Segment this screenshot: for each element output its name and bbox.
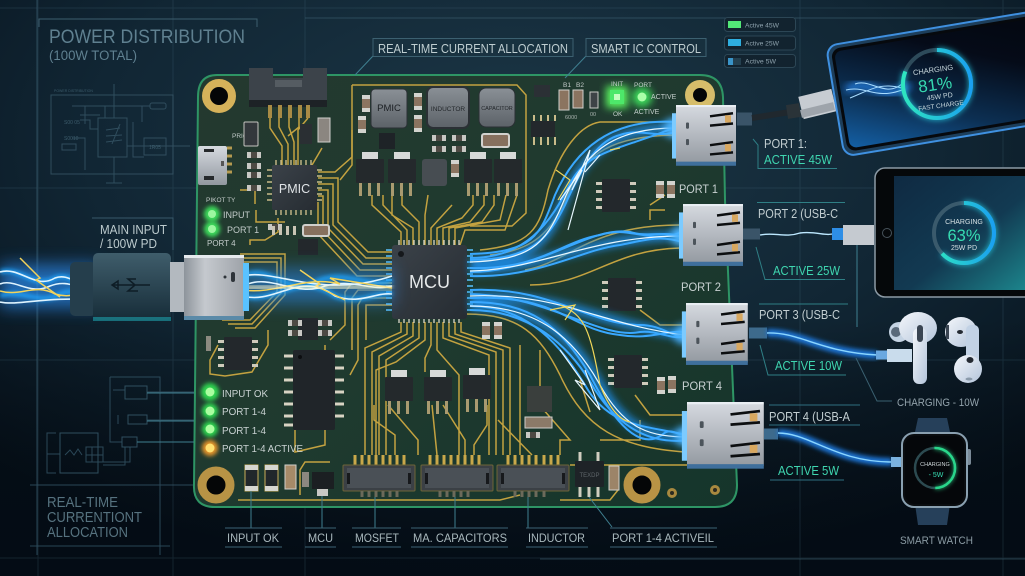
cable: port 2 to tablet (743, 233, 874, 235)
title: POWER DISTRIBUTION (49, 26, 245, 48)
status LEDs: left top: INPUT (223, 210, 251, 220)
MCU chip: MCU (409, 272, 450, 292)
label: port 4: PORT 4 (USB-A (769, 410, 851, 424)
main input plug (70, 253, 249, 321)
label: port 1 (753, 137, 837, 168)
small parts: top middle: 6000 (565, 115, 577, 121)
energy flow: output lightning to ports (470, 118, 695, 446)
watch charge ring (915, 448, 955, 488)
PMIC chip (267, 160, 322, 215)
legend (724, 18, 796, 68)
label: inductor: INDUCTOR (528, 531, 585, 545)
bottom-left parts (245, 465, 334, 496)
bottom connectors (343, 452, 619, 497)
port silk labels (679, 182, 722, 393)
legend row: active 25W: Active 25W (745, 40, 780, 48)
device: earbuds (889, 312, 982, 384)
status LEDs: left bottom (201, 383, 303, 456)
panel: circuit board (194, 68, 737, 507)
status LEDs: left top (204, 133, 259, 248)
callout: smart IC control: SMART IC CONTROL (591, 42, 701, 56)
tablet charge ring (934, 203, 994, 263)
top power components: PMIC (377, 103, 401, 114)
label: smart watch: SMART WATCH (900, 535, 973, 547)
legend row: active 5W: Active 5W (745, 58, 777, 66)
status LEDs: left bottom: INPUT OK (222, 389, 268, 400)
PMIC chip: PMIC (279, 182, 310, 196)
DIP IC (284, 350, 344, 430)
phone energy bolt (846, 83, 910, 98)
status LEDs: left top: PORT 4 (207, 239, 236, 248)
label: port 2: ACTIVE 25W (773, 264, 840, 278)
title: (100W TOTAL) (49, 48, 137, 63)
schematic: top left: S00 05 (64, 120, 80, 126)
label: mcu: MCU (308, 531, 333, 545)
schematic: top left (51, 84, 190, 183)
callout: main input: MAIN INPUT (100, 223, 167, 237)
USB port 4 (682, 402, 764, 469)
MCU chip (386, 240, 473, 323)
left small parts (206, 118, 332, 370)
status LEDs: top: INIT (611, 81, 623, 88)
energy flow: input lightning (0, 258, 393, 308)
schematic: bottom left (30, 0, 200, 555)
status LEDs: top: ACTIVE (651, 94, 677, 101)
label: port 1: PORT 1: (764, 137, 807, 151)
status LEDs: left top: PORT 1 (227, 225, 259, 235)
small parts: top middle: B1 (563, 82, 571, 89)
bottom connectors: TEXDP (579, 473, 600, 479)
top MOSFETs (356, 152, 522, 196)
port silk labels: PORT 1 (679, 182, 718, 196)
status LEDs: top (606, 81, 677, 118)
phone charge ring: CHARGING (912, 63, 954, 77)
phone charge ring: FAST CHARGE (918, 99, 965, 113)
port silk labels: PORT 2 (681, 280, 721, 294)
label: port 2: PORT 2 (USB-C (758, 207, 838, 221)
callout: real-time current allocation: REAL-TIME CURRENT ALLOCATION (378, 42, 568, 56)
small parts: top middle: B2 (576, 82, 584, 89)
label: port 2 (756, 202, 845, 280)
status LEDs: top: OK (613, 111, 623, 118)
caption: real-time current allocation (47, 495, 142, 541)
label: capacitors: MA. CAPACITORS (413, 531, 507, 545)
label: port 1: ACTIVE 45W (764, 153, 832, 167)
board substrate (194, 75, 737, 507)
phone charge ring (903, 50, 971, 118)
USB port 1 (672, 105, 736, 166)
header connector (249, 68, 327, 118)
label: port 3 (759, 304, 848, 375)
bottom labels (225, 528, 717, 547)
caption: real-time current allocation: CURRENTIONT (47, 510, 142, 526)
watch charge ring: CHARGING (920, 462, 950, 468)
title (39, 19, 257, 63)
schematic: top left: 1R05 (149, 145, 161, 151)
top power components: CAPACITOR (481, 106, 513, 112)
right small parts (525, 179, 720, 498)
status LEDs: left bottom: PORT 1-4 (222, 426, 266, 437)
port silk labels: PORT 4 (682, 379, 722, 393)
callout: main input (92, 218, 173, 251)
device: tablet (875, 168, 1025, 297)
leader lines (137, 56, 857, 528)
label: port 1-4 active: PORT 1-4 ACTIVEIL (612, 531, 714, 545)
callout: main input: / 100W PD (100, 237, 157, 251)
gold traces (210, 85, 700, 500)
label: port 4 (769, 405, 860, 480)
device: smart watch (902, 418, 971, 525)
small parts: top middle (531, 82, 598, 145)
mounting holes (202, 83, 711, 499)
status LEDs: left top: PRI6 (232, 133, 247, 140)
small parts: top middle: 00 (590, 112, 596, 118)
label: port 3: ACTIVE 10W (775, 359, 842, 373)
status LEDs: top: ACTIVE (634, 109, 660, 116)
USB port 3 (682, 303, 748, 365)
status LEDs: left top: PIKOT TY (206, 197, 236, 204)
cable: port 3 to earbuds (749, 333, 912, 356)
device: phone (826, 3, 1025, 156)
bottom MOSFETs (385, 322, 502, 414)
cable: port 1 to phone (737, 100, 834, 119)
top power components: INDUCTOR (431, 106, 465, 113)
phone charge ring: 45W PD (926, 92, 953, 103)
USB port 2 (679, 204, 743, 266)
tablet charge ring: 25W PD (951, 245, 977, 252)
caption: real-time current allocation: REAL-TIME (47, 495, 118, 511)
status LEDs: top: PORT (634, 82, 652, 89)
phone charge ring: 81% (917, 73, 953, 97)
label: earbuds charging (856, 358, 980, 409)
micro USB connector (198, 146, 232, 185)
label: port 3: PORT 3 (USB-C (759, 308, 840, 322)
schematic: top left: S0010 (64, 136, 79, 142)
label: earbuds charging: CHARGING - 10W (897, 397, 980, 409)
status LEDs: left bottom: PORT 1-4 (222, 407, 266, 418)
label: mosfet: MOSFET (355, 531, 400, 545)
label: input ok: INPUT OK (227, 531, 279, 545)
cable: port 4 to watch (764, 433, 903, 462)
legend row: active 45W: Active 45W (745, 22, 780, 30)
caption: real-time current allocation: ALLOCATION (47, 525, 128, 541)
status LEDs: left bottom: PORT 1-4 ACTIVE (222, 444, 303, 455)
watch charge ring: - 5W (929, 472, 944, 479)
top power components (358, 87, 515, 152)
tablet charge ring: 63% (947, 227, 981, 245)
schematic: top left: POWER DISTRIBUTION (54, 89, 93, 93)
tablet charge ring: CHARGING (945, 219, 983, 226)
label: port 4: ACTIVE 5W (778, 464, 839, 478)
